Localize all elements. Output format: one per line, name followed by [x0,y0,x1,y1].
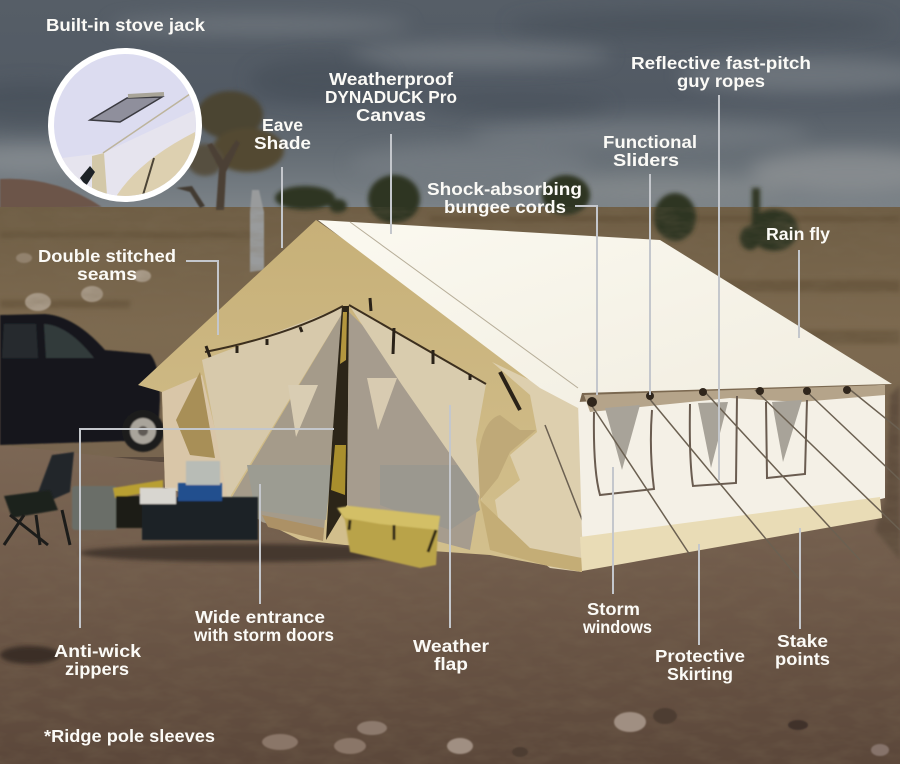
callout: stake points: points [775,649,830,669]
window flaps [605,400,802,470]
right door mesh [347,312,482,550]
bushes on the horizon [275,175,798,251]
weather flap drape [492,362,582,572]
callout: weather flap: flap [434,654,468,674]
tent [138,220,900,580]
callout: reflective guy ropes: guy ropes [677,71,765,91]
callout: shock-absorbing bungee cords [427,179,597,395]
footnote: ridge pole sleeves: *Ridge pole sleeves [44,726,215,746]
roof [318,220,892,408]
right door flap [349,305,486,500]
big tree [176,91,284,210]
callout: built-in stove jack: Built-in stove jack [46,15,205,35]
callout: weather flap: Weather [413,636,489,656]
stove pipe [250,190,264,272]
callout: reflective guy ropes [631,53,811,480]
dirt foreground [0,207,900,764]
rope anchors [587,386,851,407]
tent front gable wall [138,220,582,572]
callout: weather flap [413,405,489,674]
callout: protective skirting: Skirting [667,664,733,684]
grass field [0,207,900,457]
callout: weatherproof canvas [325,69,457,234]
window frames [594,396,807,495]
eave shadows [584,385,885,412]
yellow cooler [337,506,440,568]
sky background [0,0,900,215]
callout: double stitched seams: Double stitched [38,246,176,266]
door opening [326,306,349,540]
callout: double stitched seams [38,246,218,335]
callout: stake points [775,528,830,669]
lower front wall light area [162,375,232,500]
left door mesh [232,312,343,541]
storm door ties [205,298,486,384]
camp chair [4,452,74,545]
callout: protective skirting [655,544,745,684]
distant hill [0,179,102,210]
callout: storm windows: Storm [587,599,640,619]
callout: eave shade: Shade [254,133,311,153]
callout: eave shade [254,115,311,248]
callout: anti-wick zippers: Anti-wick [54,641,141,661]
callout: rain fly: Rain fly [766,224,830,244]
callout: double stitched seams: seams [77,264,137,284]
callout: shock-absorbing bungee cords: bungee cords [444,197,566,217]
guy ropes [590,388,900,580]
callout: weatherproof canvas: Canvas [356,105,426,125]
callout: functional sliders [603,132,697,395]
callout: eave shade: Eave [262,115,303,135]
callout: anti-wick zippers [54,429,334,679]
callout: anti-wick zippers: zippers [65,659,129,679]
callout: wide entrance: Wide entrance [195,607,325,627]
callout: wide entrance: with storm doors [193,625,334,645]
truck [0,314,164,452]
callout: functional sliders: Sliders [613,150,679,170]
callout: protective skirting: Protective [655,646,745,666]
callout: reflective guy ropes: Reflective fast-pitch [631,53,811,73]
inset: built-in stove jack [48,48,202,210]
left door flap [202,307,343,500]
side wall [578,385,885,568]
callout: weatherproof canvas: DYNADUCK Pro [325,87,457,107]
coolers and gear [72,461,258,540]
callout: rain fly [766,224,830,338]
skirting [580,497,882,571]
callout: weatherproof canvas: Weatherproof [329,69,453,89]
callout: shock-absorbing bungee cords: Shock-absorbing [427,179,582,199]
callout: functional sliders: Functional [603,132,697,152]
callout: wide entrance [193,484,334,645]
callout: stake points: Stake [777,631,828,651]
callout: storm windows: windows [582,617,652,637]
callout: storm windows [582,467,652,637]
